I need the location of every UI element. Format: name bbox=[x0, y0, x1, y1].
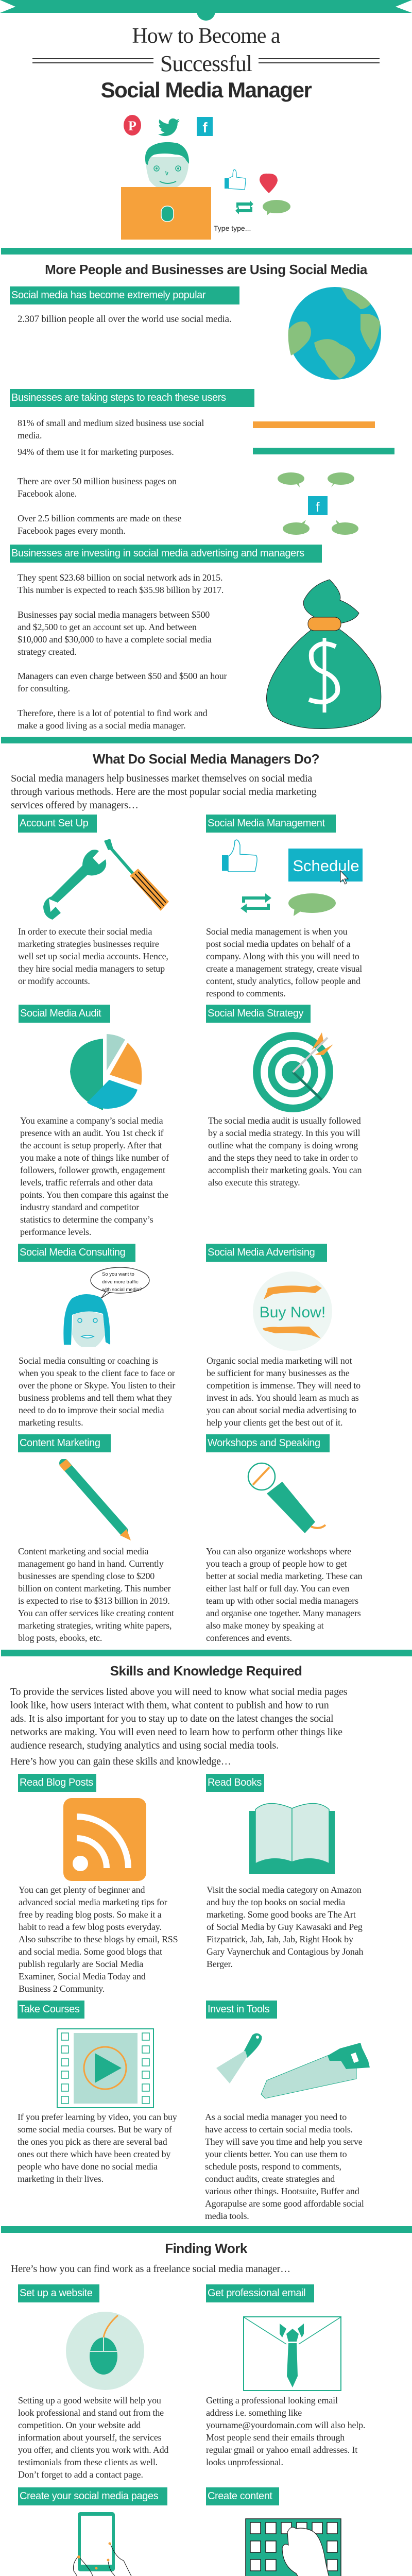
stat: 50 million pages: Facebook alone. bbox=[18, 488, 77, 499]
stat: consulting rates: for consulting. bbox=[18, 683, 70, 693]
text: management: post social media updates on behalf of a bbox=[206, 939, 350, 949]
label: website: Set up a website bbox=[20, 2287, 92, 2299]
text: advertising: Organic social media marketing will not bbox=[207, 1355, 352, 1366]
stat: 50 million pages: There are over 50 million business pages on bbox=[18, 476, 177, 486]
text: books: Fitzpatrick, Jab, Jab, Jab, Right Hook by bbox=[207, 1934, 353, 1944]
stat: manager pay: and $2,500 to get an account set up. And between bbox=[18, 622, 197, 632]
text: blog posts: publish regularly are Social Media bbox=[19, 1959, 143, 1969]
text: courses: some social media courses. But be wary of bbox=[18, 2124, 172, 2134]
stat: ad spend bbox=[18, 572, 224, 595]
stat: comments: Facebook pages every month. bbox=[18, 526, 126, 536]
icon: globe bbox=[288, 287, 381, 380]
text: strategy: and the steps they need to take in order to bbox=[208, 1153, 358, 1163]
label: workshops: Workshops and Speaking bbox=[208, 1437, 320, 1449]
icon: management (like, schedule, retweet, chat) bbox=[222, 839, 363, 916]
label: social pages bbox=[18, 2487, 167, 2505]
label: books bbox=[206, 1774, 264, 1792]
label: create content bbox=[206, 2487, 279, 2505]
heading: skills: Skills and Knowledge Required bbox=[110, 1663, 302, 1679]
icon: pencil bbox=[59, 1459, 131, 1540]
text: account set up: marketing strategies businesses require bbox=[18, 939, 159, 949]
laptop bbox=[121, 187, 211, 240]
text: consulting: Social media consulting or coaching is bbox=[19, 1355, 158, 1366]
icon: pie chart bbox=[70, 1034, 142, 1110]
text: website: testimonials from these clients as well. bbox=[18, 2457, 158, 2467]
title: Successful bbox=[160, 51, 252, 76]
stat: comments: Over 2.5 billion comments are made on these bbox=[18, 513, 181, 523]
label: advertising bbox=[206, 1244, 327, 1262]
stat: users: 2.307 billion people all over the world use social media. bbox=[18, 314, 231, 325]
icon: retweet bbox=[235, 200, 253, 214]
text: email bbox=[206, 2394, 365, 2468]
text: courses: ones out there which have been created by bbox=[18, 2149, 170, 2159]
label: blog posts: Read Blog Posts bbox=[20, 1777, 93, 1788]
text: advertising: you can about social media advertising to bbox=[207, 1405, 356, 1415]
text: workshops: also make money by speaking at bbox=[206, 1620, 323, 1631]
text: website: Don’t forget to add a contact page. bbox=[18, 2469, 143, 2480]
heading: what do managers do: What Do Social Media Managers Do? bbox=[93, 751, 319, 767]
text: consulting bbox=[19, 1355, 175, 1428]
text: tools: your clients better. You can use them to bbox=[205, 2149, 347, 2159]
type text: Type type... bbox=[214, 224, 251, 232]
hero illustration: manager at laptop bbox=[121, 115, 290, 240]
conclusion: Therefore, there is a lot of potential to find work and bbox=[18, 708, 207, 718]
title: How to Become a bbox=[132, 24, 280, 48]
text: email: Most people send their emails through bbox=[206, 2432, 345, 2443]
text: consulting: business problems and tell them what they bbox=[19, 1393, 172, 1403]
icon: thumbs up bbox=[225, 170, 246, 190]
text: website: competition. On your website add bbox=[18, 2420, 141, 2430]
label: businesses reach bbox=[10, 389, 254, 407]
intro: skills: ads. It is also important for you to stay up to date on the latest changes the social bbox=[10, 1713, 333, 1724]
stat: 81%: media. bbox=[18, 430, 42, 440]
stat: manager pay: Businesses pay social media managers between $500 bbox=[18, 609, 210, 620]
text: audit: performance levels. bbox=[20, 1227, 91, 1237]
text: content marketing: marketing strategies, writing white papers, bbox=[18, 1620, 171, 1631]
text: blog posts: Business 2 Community. bbox=[19, 1984, 105, 1994]
text: email: regular gmail or yahoo email addresses. It bbox=[206, 2445, 357, 2455]
text: tools: They will save you time and help you serve bbox=[205, 2137, 363, 2147]
heading: finding work: Finding Work bbox=[165, 2241, 247, 2256]
text: email: yourname@yourdomain.com will also help. bbox=[206, 2420, 365, 2430]
text: management: Social media management is when you bbox=[206, 926, 347, 937]
label: investing: Businesses are investing in social media advertising and managers bbox=[11, 548, 304, 559]
intro: gain skills: Here’s how you can gain these skills and knowledge… bbox=[10, 1756, 231, 1767]
icon: pinterest: P bbox=[128, 118, 136, 133]
intro: skills bbox=[10, 1686, 347, 1751]
stat: consulting rates bbox=[18, 671, 227, 693]
text: courses: the ones you pick as there are several bad bbox=[18, 2137, 167, 2147]
text: audit: statistics to determine the company’s bbox=[20, 1214, 153, 1225]
text: workshops: and organise one together. Many managers bbox=[206, 1608, 361, 1618]
text: management: respond to comments. bbox=[206, 988, 285, 998]
text: blog posts: You can get plenty of beginner and bbox=[19, 1885, 145, 1895]
conclusion: make a good living as a social media manager. bbox=[18, 720, 185, 731]
icon: facebook with comments bbox=[278, 472, 358, 535]
label: investing bbox=[10, 545, 322, 563]
icon: facebook with comments: f bbox=[316, 499, 320, 515]
label: advertising: Social Media Advertising bbox=[208, 1247, 315, 1258]
icon: consultant with speech bubble: drive more traffic bbox=[102, 1279, 139, 1285]
text: management bbox=[206, 926, 362, 998]
text: tools: media tools. bbox=[205, 2211, 249, 2221]
text: email: Getting a professional looking email bbox=[206, 2395, 338, 2405]
text: account set up: In order to execute their social media bbox=[18, 926, 152, 937]
intro: services: through various methods. Here are the most popular social media marketing bbox=[11, 786, 317, 798]
text: strategy bbox=[208, 1115, 362, 1188]
icon: buy now badge: Buy Now! bbox=[260, 1304, 325, 1321]
text: strategy: by a social media strategy. In this you will bbox=[208, 1128, 360, 1138]
text: management: content, study analytics, follow people and bbox=[206, 976, 360, 986]
text: books: Visit the social media category on Amazon bbox=[207, 1885, 362, 1895]
label: account set up bbox=[18, 815, 97, 833]
text: audit: industry standard and competitor bbox=[20, 1202, 139, 1212]
stat: 81%: 81% of small and medium sized business use social bbox=[18, 418, 204, 428]
label: social pages: Create your social media pages bbox=[20, 2490, 158, 2502]
text: books bbox=[207, 1885, 364, 1969]
stat: consulting rates: Managers can even charge between $50 and $500 an hour bbox=[18, 671, 227, 681]
text: advertising: help your clients get the best out of it. bbox=[207, 1417, 342, 1428]
text: audit: the account is setup properly. After that bbox=[20, 1140, 162, 1150]
text: blog posts: habit to read a few blog posts everyday. bbox=[19, 1922, 162, 1932]
label: courses bbox=[18, 2001, 84, 2019]
title: Social Media Manager bbox=[101, 78, 311, 102]
text: courses: people who have done no social media bbox=[18, 2161, 158, 2172]
text: website: you offer, and clients you work with. Add bbox=[18, 2445, 168, 2455]
text: books: Gary Vaynerchuk and Contagious by Jonah bbox=[207, 1946, 363, 1957]
text: tools bbox=[205, 2112, 364, 2221]
text: content marketing bbox=[18, 1546, 174, 1643]
icon: twitter bbox=[158, 118, 180, 136]
text: strategy: accomplish their marketing goals. You can bbox=[208, 1165, 362, 1175]
label: professional email: Get professional email bbox=[208, 2287, 305, 2299]
intro: skills: audience research, studying analytics and using social media tools. bbox=[10, 1740, 279, 1751]
label: social media management bbox=[206, 815, 336, 833]
text: blog posts: and social media. Some good blogs that bbox=[19, 1946, 162, 1957]
text: audit: levels, traffic referrals and other data bbox=[20, 1177, 153, 1188]
text: account set up: or modify accounts. bbox=[18, 976, 90, 986]
text: strategy: The social media audit is usually followed bbox=[208, 1115, 361, 1126]
text: audit: you make a note of things like number of bbox=[20, 1153, 169, 1163]
label: audit: Social Media Audit bbox=[20, 1008, 101, 1019]
text: consulting: marketing results. bbox=[19, 1417, 83, 1428]
icon: buy now badge bbox=[253, 1272, 332, 1351]
text: consulting: need to do to improve their social media bbox=[19, 1405, 164, 1415]
bar: 81% bbox=[253, 421, 375, 428]
label: extremely popular bbox=[10, 286, 239, 304]
label: tools bbox=[206, 2001, 277, 2019]
icon: management (like, schedule, retweet, chat): Schedule bbox=[293, 857, 359, 875]
text: workshops bbox=[206, 1546, 363, 1643]
text: website bbox=[18, 2394, 168, 2481]
icon: pinterest bbox=[124, 115, 141, 135]
text: content marketing: billion on content marketing. This number bbox=[18, 1583, 170, 1594]
label: professional email bbox=[206, 2284, 314, 2302]
text: tools: As a social media manager you need to bbox=[205, 2112, 347, 2122]
icon: putty knife and saw bbox=[216, 2033, 370, 2099]
label: workshops bbox=[206, 1434, 330, 1452]
intro: skills: look like, how users interact with them, what content to publish and how to run bbox=[10, 1700, 329, 1711]
text: books: of Social Media by Guy Kawasaki and Peg bbox=[207, 1922, 363, 1932]
stat: ad spend: This number is expected to reach $35.98 billion by 2017. bbox=[18, 585, 224, 595]
text: tools: Agorapulse are some good affordable social bbox=[205, 2198, 364, 2209]
stat: 81% bbox=[18, 418, 204, 440]
icon: target bbox=[253, 1032, 333, 1112]
text: strategy: outline what the company is doing wrong bbox=[208, 1140, 358, 1150]
conclusion bbox=[18, 708, 207, 731]
text: courses: marketing in their lives. bbox=[18, 2174, 104, 2184]
icon: tablet in hands bbox=[71, 2511, 140, 2576]
label: content marketing: Content Marketing bbox=[20, 1437, 100, 1449]
stat: ad spend: They spent $23.68 billion on social network ads in 2015. bbox=[18, 572, 222, 583]
text: blog posts: free by reading blog posts. So make it a bbox=[19, 1909, 161, 1920]
text: management: create a management strategy, create visual bbox=[206, 963, 362, 974]
icon: wrench and screwdriver bbox=[43, 839, 169, 920]
text: blog posts: Examiner, Social Media Today and bbox=[19, 1971, 146, 1981]
icon: consultant with speech bubble bbox=[63, 1267, 150, 1347]
intro: services: services offered by managers… bbox=[11, 800, 139, 811]
text: consulting: over the phone or Skype. You listen to their bbox=[19, 1380, 175, 1391]
text: tools: various other things. Hootsuite, Buffer and bbox=[205, 2186, 359, 2196]
label: strategy: Social Media Strategy bbox=[208, 1008, 303, 1019]
label: create content: Create content bbox=[208, 2490, 272, 2502]
intro: services bbox=[11, 773, 317, 811]
stat: manager pay: $10,000 and $30,000 to have a complete social media bbox=[18, 634, 212, 645]
label: extremely popular: Social media has become extremely popular bbox=[11, 290, 205, 301]
label: books: Read Books bbox=[208, 1777, 262, 1788]
icon: consultant with speech bubble: So you want to bbox=[102, 1272, 134, 1277]
text: blog posts: advanced social media marketing tips for bbox=[19, 1897, 167, 1907]
intro: services: Social media managers help businesses market themselves on social media bbox=[11, 773, 312, 784]
icon: money bag bbox=[266, 579, 381, 729]
text: strategy: also execute this strategy. bbox=[208, 1177, 300, 1188]
label: consulting: Social Media Consulting bbox=[20, 1247, 125, 1258]
text: content marketing: management go hand in hand. Currently bbox=[18, 1558, 164, 1569]
text: blog posts bbox=[19, 1885, 178, 1994]
label: account set up: Account Set Up bbox=[20, 818, 88, 829]
text: workshops: You can also organize workshops where bbox=[206, 1546, 351, 1556]
label: courses: Take Courses bbox=[19, 2004, 79, 2015]
character head bbox=[145, 142, 189, 190]
icon: rss bbox=[63, 1798, 146, 1881]
text: advertising: be sufficient for many businesses as the bbox=[207, 1368, 350, 1378]
text: workshops: you teach a group of people how to get bbox=[206, 1558, 347, 1569]
label: content marketing bbox=[18, 1434, 111, 1452]
text: management: company. Along with this you will need to bbox=[206, 951, 359, 961]
text: workshops: better at social media marketing. These can bbox=[206, 1571, 362, 1581]
icon: consultant with speech bubble: with social media? bbox=[101, 1287, 142, 1293]
text: account set up: well set up social media accounts. Hence, bbox=[18, 951, 168, 961]
icon: keyboard with hand bbox=[245, 2518, 342, 2576]
text: content marketing: is expected to rise to $313 billion in 2019. bbox=[18, 1596, 170, 1606]
icon: heart pin bbox=[260, 174, 278, 193]
label: website bbox=[18, 2284, 99, 2302]
label: businesses reach: Businesses are taking steps to reach these users bbox=[11, 392, 226, 403]
text: account set up bbox=[18, 926, 168, 986]
icon: chat bubble bbox=[263, 200, 290, 215]
text: books: and buy the top books on social media bbox=[207, 1897, 345, 1907]
icon: mouse bbox=[66, 2312, 144, 2390]
stat: manager pay bbox=[18, 609, 212, 657]
text: audit bbox=[20, 1115, 169, 1237]
text: blog posts: Also subscribe to these blogs by email, RSS bbox=[19, 1934, 178, 1944]
stat: 50 million pages bbox=[18, 476, 177, 499]
text: website: Setting up a good website will help you bbox=[18, 2395, 161, 2405]
text: books: marketing. Some good books are The Art bbox=[207, 1909, 356, 1920]
heading: more people: More People and Businesses are Using Social Media bbox=[45, 262, 367, 277]
text: advertising: invest in ads. You should learn as much as bbox=[207, 1393, 359, 1403]
text: consulting: when you speak to the client face to face or bbox=[19, 1368, 175, 1378]
intro: finding work: Here’s how you can find work as a freelance social media manager… bbox=[11, 2263, 290, 2275]
intro: skills: networks are making. You will even need to learn how to perform other things like bbox=[10, 1726, 342, 1738]
text: audit: points. You then compare this against the bbox=[20, 1190, 168, 1200]
text: advertising bbox=[207, 1355, 360, 1428]
text: tools: conduct audits, create strategies and bbox=[205, 2174, 335, 2184]
text: account set up: they hire social media managers to setup bbox=[18, 963, 165, 974]
intro: skills: To provide the services listed above you will need to know what social media pages bbox=[10, 1686, 347, 1698]
stat: 94%: 94% of them use it for marketing purposes. bbox=[18, 447, 174, 457]
title bbox=[32, 24, 380, 102]
icon: envelope with tie bbox=[243, 2316, 342, 2392]
text: audit: presence with an audit. You 1st check if bbox=[20, 1128, 163, 1138]
text: website: information about yourself, the services bbox=[18, 2432, 161, 2443]
bar: 94% bbox=[253, 448, 394, 454]
label: social media management: Social Media Management bbox=[208, 818, 325, 829]
text: email: looks unprofessional. bbox=[206, 2457, 283, 2467]
text: advertising: competition is immense. They will need to bbox=[207, 1380, 360, 1391]
text: audit: You examine a company’s social media bbox=[20, 1115, 163, 1126]
text: workshops: team up with other social media managers bbox=[206, 1596, 358, 1606]
icon: facebook bbox=[197, 117, 213, 136]
top ribbon bbox=[0, 0, 412, 21]
text: email: address i.e. something like bbox=[206, 2408, 302, 2418]
stat: manager pay: strategy created. bbox=[18, 647, 77, 657]
text: content marketing: businesses are spending close to $200 bbox=[18, 1571, 154, 1581]
label: consulting bbox=[18, 1244, 135, 1262]
text: website: look professional and stand out from the bbox=[18, 2408, 164, 2418]
label: strategy bbox=[206, 1005, 311, 1023]
text: tools: schedule posts, respond to comments, bbox=[205, 2161, 341, 2172]
text: content marketing: Content marketing and social media bbox=[18, 1546, 148, 1556]
icon: video film bbox=[57, 2028, 154, 2108]
text: workshops: either last half or full day. You can even bbox=[206, 1583, 349, 1594]
text: content marketing: blog posts, ebooks, etc. bbox=[18, 1633, 102, 1643]
label: audit bbox=[19, 1005, 110, 1023]
text: audit: followers, follower growth, engagement bbox=[20, 1165, 165, 1175]
icon: book bbox=[249, 1803, 335, 1874]
icon: facebook: f bbox=[202, 120, 208, 135]
text: books: Berger. bbox=[207, 1959, 233, 1969]
text: content marketing: You can offer services like creating content bbox=[18, 1608, 174, 1618]
text: workshops: conferences and events. bbox=[206, 1633, 292, 1643]
icon: microphone bbox=[247, 1462, 327, 1533]
text: courses: If you prefer learning by video, you can buy bbox=[18, 2112, 177, 2122]
text: tools: have access to certain social media tools. bbox=[205, 2124, 353, 2134]
text: courses bbox=[18, 2112, 177, 2184]
label: blog posts bbox=[18, 1774, 96, 1792]
stat: comments bbox=[18, 513, 181, 536]
label: tools: Invest in Tools bbox=[208, 2004, 269, 2015]
